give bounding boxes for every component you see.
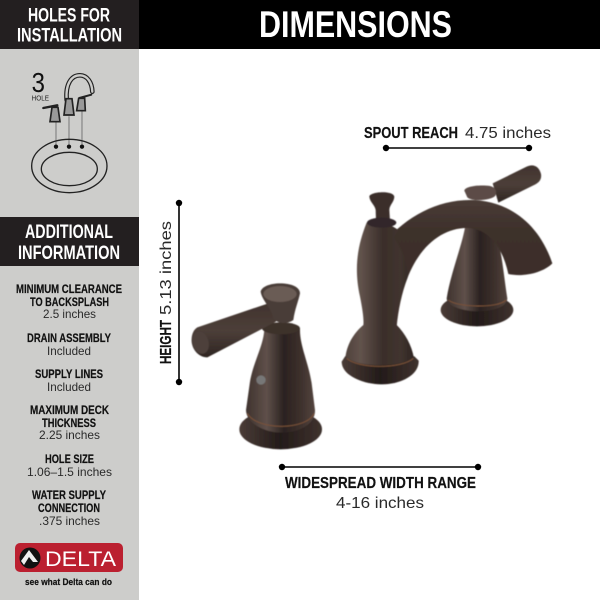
column body xyxy=(345,221,414,366)
dimension: spout reach: 4.75 inches xyxy=(465,125,551,142)
spec: drain assembly xyxy=(27,331,111,358)
heading: holes for installation: INSTALLATION xyxy=(17,26,122,46)
lever xyxy=(192,303,278,357)
panel: sidebar xyxy=(0,0,139,600)
title bar: dimensions xyxy=(139,0,600,49)
spec: hole size: 1.06–1.5 inches xyxy=(27,465,112,479)
cap xyxy=(261,283,300,323)
heading: additional information: INFORMATION xyxy=(18,243,120,264)
dimension: widespread width range xyxy=(279,464,481,512)
spec: minimum clearance: MINIMUM CLEARANCE xyxy=(16,282,122,296)
spec: maximum deck thickness: THICKNESS xyxy=(42,416,96,430)
spec: supply lines: SUPPLY LINES xyxy=(35,367,103,381)
spec: water supply connection: WATER SUPPLY xyxy=(32,488,106,502)
spec: maximum deck thickness: 2.25 inches xyxy=(39,428,100,442)
rear handle lever xyxy=(493,165,541,203)
spec: drain assembly: DRAIN ASSEMBLY xyxy=(27,331,111,345)
faucet: spout and rear handle xyxy=(342,165,552,384)
icon: 3 hole faucet and sink diagram: HOLE xyxy=(32,96,49,103)
spec: minimum clearance xyxy=(16,282,122,321)
icon: 3 hole faucet and sink diagram xyxy=(32,67,107,193)
logo: Delta xyxy=(15,543,123,587)
spec: minimum clearance: 2.5 inches xyxy=(43,307,96,321)
dimension: height: HEIGHT xyxy=(158,320,175,364)
spec: water supply connection: CONNECTION xyxy=(38,501,100,515)
spec: water supply connection: .375 inches xyxy=(39,514,100,528)
spec: supply lines xyxy=(35,367,103,394)
heading: holes for installation xyxy=(0,0,139,49)
rear handle cap xyxy=(464,186,496,200)
spec: maximum deck thickness: MAXIMUM DECK xyxy=(30,403,109,417)
dimension: widespread width range: 4-16 inches xyxy=(336,495,424,512)
rear handle body xyxy=(447,227,507,311)
rear handle base xyxy=(441,294,513,326)
title bar: dimensions: DIMENSIONS xyxy=(259,4,452,45)
spec: minimum clearance: TO BACKSPLASH xyxy=(30,295,109,309)
dimension: widespread width range: WIDESPREAD WIDTH RANGE xyxy=(285,475,476,492)
handle base xyxy=(239,409,322,449)
dimension: height: 5.13 inches xyxy=(158,221,175,315)
heading: additional information: ADDITIONAL xyxy=(25,222,113,243)
icon: 3 hole faucet and sink diagram: 3 xyxy=(32,67,45,98)
column base xyxy=(342,356,419,384)
faucet: front handle xyxy=(190,283,322,449)
spout arc xyxy=(370,200,552,327)
pop-up knob xyxy=(369,192,394,221)
dimension: spout reach: SPOUT REACH xyxy=(364,125,458,142)
heading: additional information xyxy=(0,217,139,266)
logo: Delta: see what Delta can do xyxy=(25,577,112,587)
spec: maximum deck thickness xyxy=(30,403,109,442)
spec: hole size xyxy=(27,452,112,479)
dimension: height xyxy=(158,200,182,385)
spec: drain assembly: Included xyxy=(47,344,91,358)
handle body xyxy=(246,328,315,433)
heading: holes for installation: HOLES FOR xyxy=(28,6,110,26)
spec: water supply connection xyxy=(32,488,106,528)
logo: Delta: DELTA xyxy=(45,548,116,571)
dimension: spout reach xyxy=(364,125,551,151)
spec: hole size: HOLE SIZE xyxy=(45,452,94,466)
spec: supply lines: Included xyxy=(47,380,91,394)
